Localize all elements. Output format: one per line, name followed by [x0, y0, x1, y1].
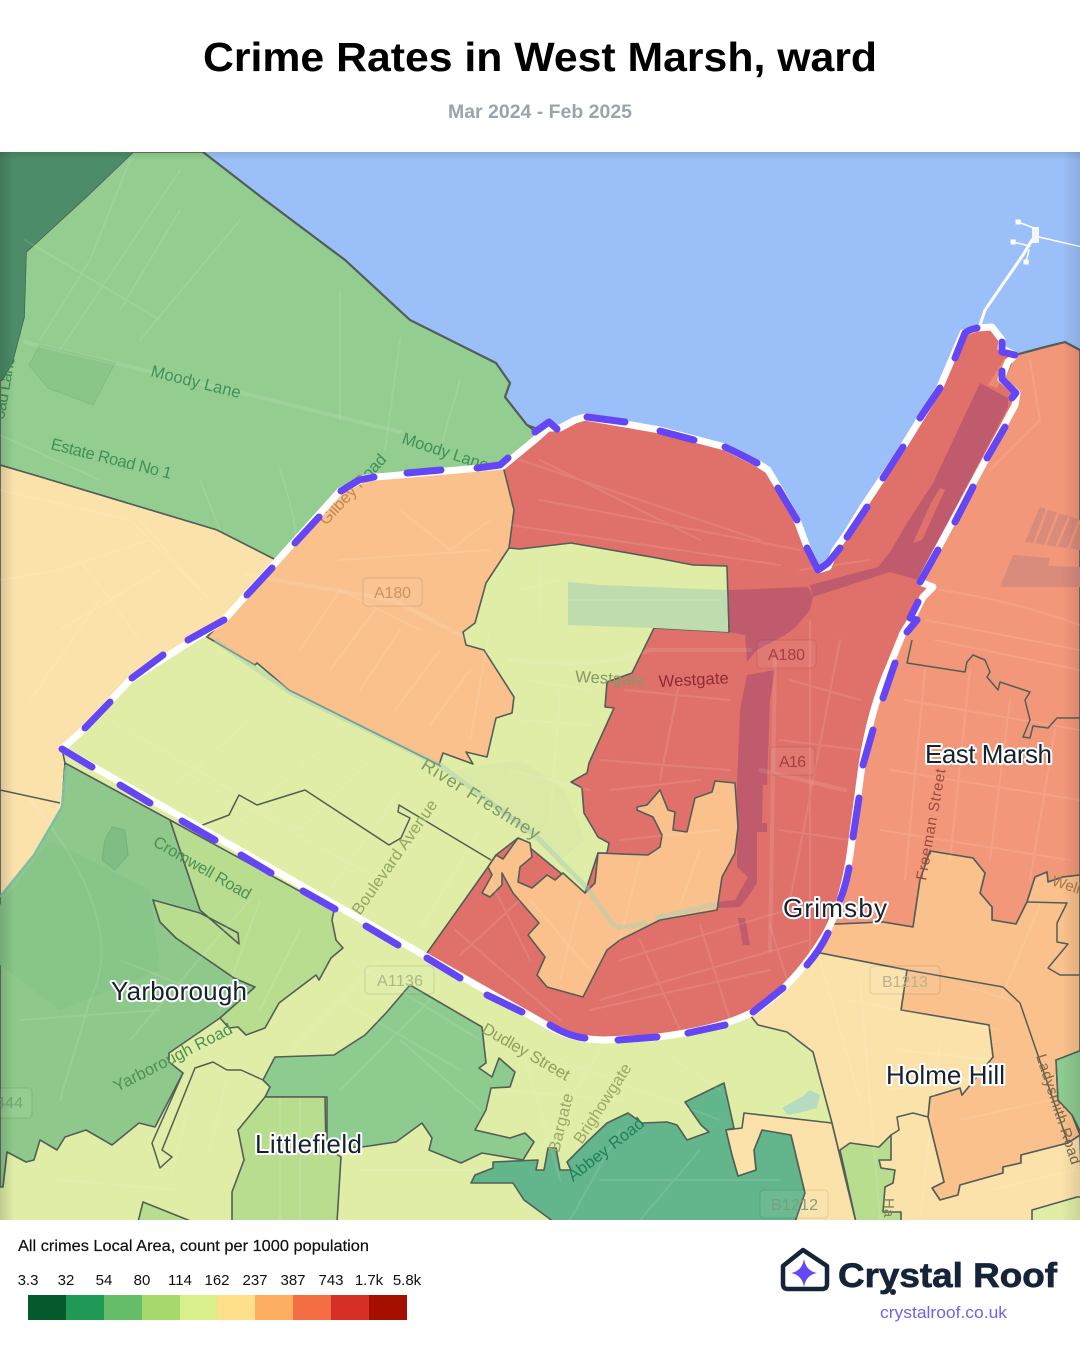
road shield: A1136: A1136	[377, 973, 423, 990]
ward: street network	[110, 460, 870, 1030]
ward boundary: West Marsh	[62, 327, 1017, 1040]
north quay strip	[988, 358, 1009, 388]
road shield: A16: A16	[779, 754, 806, 771]
road shield: B1212: B1212	[771, 1197, 818, 1214]
logo wordmark: Crystal Roof	[838, 1257, 1058, 1295]
ward: docks and water basins	[717, 383, 1008, 945]
road label: Dudley Street: Dudley Street	[479, 1020, 573, 1085]
river on western edge	[0, 765, 66, 897]
road label: Brighowgate: Brighowgate	[570, 1060, 635, 1147]
legend tick labels: 162	[204, 1272, 230, 1289]
legend colour scale	[28, 1295, 407, 1320]
ward: pale green residential west section	[62, 543, 729, 958]
road label: Yarborough Road: Yarborough Road	[111, 1020, 236, 1096]
legend	[18, 1238, 422, 1320]
pond	[782, 1090, 820, 1115]
title: Crime Rates in West Marsh, ward	[203, 34, 877, 80]
neighbourhood: East Marsh	[815, 342, 1080, 927]
jetty arms	[1013, 222, 1080, 262]
legend tick labels: 32	[58, 1272, 74, 1289]
West Marsh ward: red base	[62, 327, 1017, 1040]
road label: Westgate west: Westgate	[575, 668, 646, 690]
road shield: A16	[770, 747, 815, 775]
water: Humber estuary	[190, 152, 1080, 600]
legend tick labels: 237	[242, 1272, 268, 1289]
road shield: A1444	[0, 1088, 32, 1118]
road label: Moody Lane east: Moody Lane	[400, 430, 491, 475]
road label: Bargate: Bargate	[545, 1091, 577, 1154]
road label: Estate Road No 1: Estate Road No 1	[49, 435, 174, 483]
boundary white casing	[62, 327, 1017, 1040]
south-west street network	[20, 800, 780, 1220]
choropleth map	[0, 152, 1080, 1220]
road shield: A1136	[365, 966, 434, 994]
place: Holme Hill: Holme Hill	[886, 1060, 1005, 1090]
east and south-east street network	[820, 360, 1080, 1220]
legend tick labels: 114	[168, 1272, 192, 1289]
place: Yarborough: Yarborough	[111, 976, 247, 1006]
legend tick labels: 743	[318, 1272, 344, 1289]
place: Littlefield: Littlefield	[255, 1129, 362, 1159]
place labels	[111, 739, 1052, 1159]
neighbourhood: pale yellow west	[0, 465, 276, 897]
neighbourhood: dark green north-west corner	[0, 152, 133, 380]
LSOA outline: Well area	[1027, 902, 1080, 975]
road label: River Freshney: River Freshney	[418, 754, 544, 843]
subtitle: date range: Mar 2024 - Feb 2025	[448, 102, 632, 123]
small basin	[738, 918, 750, 945]
west basin	[728, 587, 813, 662]
pier line	[980, 240, 1032, 325]
road shield: B1213: B1213	[882, 974, 928, 991]
road label: Cromwell Road: Cromwell Road	[150, 833, 254, 903]
legend tick labels	[18, 1272, 422, 1289]
LSOA outline: Holme Hill	[891, 1113, 928, 1135]
LSOA outline: Boulevard Avenue	[200, 790, 491, 860]
green area patch near Moody Lane	[29, 345, 115, 405]
neighbourhood: orange south-east	[815, 851, 1080, 1200]
website: crystalroof.co.uk	[880, 1304, 1008, 1322]
small light green block south	[138, 1202, 193, 1222]
road shield: A180 west: A180	[374, 585, 411, 602]
road label: Abbey Road: Abbey Road	[564, 1114, 648, 1185]
coast outlines	[203, 152, 1080, 430]
fish dock	[1025, 507, 1080, 550]
legend tick labels: 54	[96, 1272, 112, 1289]
road label: Moody Lane: Moody Lane	[149, 362, 243, 402]
pier head	[1032, 227, 1039, 243]
LSOA outline: Yarborough Road	[152, 1062, 263, 1168]
Riverhead channel	[717, 670, 775, 908]
Alexandra dock	[810, 383, 1008, 597]
neighbourhood: bottom right pale block	[1032, 1197, 1080, 1222]
neighbourhood: Yarborough	[0, 763, 255, 1187]
road label: Ha: Ha	[880, 1198, 897, 1218]
dock basin	[1000, 555, 1080, 587]
east docks tint	[1000, 507, 1080, 587]
jetty ends	[1013, 222, 1026, 262]
road label: Freeman Street: Freeman Street	[913, 767, 950, 882]
neighbourhood: mid green south	[263, 985, 534, 1163]
road labels	[0, 355, 1080, 1218]
map edge vignette	[0, 152, 1080, 1220]
legend tick labels: 80	[134, 1272, 150, 1289]
base land area	[0, 152, 1080, 1220]
logo keyhole dot on the y	[890, 1289, 896, 1295]
ward: orange section central south	[482, 781, 738, 997]
neighbourhood: Holme Hill yellow	[750, 952, 1080, 1222]
River Freshney	[215, 640, 717, 927]
road shield: B1213	[870, 966, 940, 994]
road shield: B1212	[760, 1190, 828, 1218]
neighbourhood: north-west industrial area	[0, 152, 545, 570]
legend tick labels: 387	[280, 1272, 306, 1289]
neighbourhood: green block east of Holme Hill	[840, 1135, 901, 1222]
fish dock quays	[1034, 509, 1079, 550]
road label: Westgate east: Westgate	[658, 669, 729, 691]
Yarborough darker interior	[0, 840, 160, 1010]
quay strip	[913, 488, 945, 543]
neighbourhood outlines inside the pale area	[0, 640, 1080, 1168]
neighbourhood: Littlefield block	[232, 1097, 341, 1222]
grimsby dock pier	[980, 222, 1080, 325]
LSOA outline: East Marsh north	[907, 640, 1080, 738]
ward: dock quay strips	[913, 358, 1009, 543]
road shield: A180 west	[363, 578, 422, 606]
title and subtitle header	[203, 34, 877, 123]
ward: green tinted industrial block	[568, 582, 728, 632]
road label: Boulevard Avenue: Boulevard Avenue	[349, 797, 441, 918]
legend title: All crimes Local Area, count per 1000 population	[18, 1238, 369, 1255]
icon: house with star	[783, 1250, 827, 1289]
road shield: A180 east	[757, 640, 816, 668]
neighbourhood: pale yellow block south	[726, 1113, 856, 1222]
legend tick labels: 3.3	[18, 1272, 38, 1289]
ward: slightly darker park area	[455, 760, 585, 860]
place: Grimsby: Grimsby	[783, 893, 887, 923]
neighbourhood: Abbey Road dark green	[471, 1083, 805, 1222]
footer with legend and logo	[18, 1238, 1058, 1322]
road shield: A180 east: A180	[768, 647, 805, 664]
legend tick labels: 1.7k	[355, 1272, 384, 1289]
LSOA outline: west	[0, 790, 60, 803]
LSOA outline: Ladysmith	[907, 970, 1068, 1143]
neighbourhood: light green south of boundary	[153, 820, 343, 1035]
legend tick labels: 5.8k	[393, 1272, 422, 1289]
place: East Marsh: East Marsh	[925, 739, 1052, 769]
ward: orange section north-west	[207, 466, 514, 765]
road label: Gilbey Road: Gilbey Road	[316, 451, 390, 529]
tree area	[102, 827, 128, 870]
Crystal Roof logo	[783, 1250, 1058, 1322]
boundary purple dashes	[62, 328, 1016, 1040]
west and north-west street network	[0, 160, 460, 700]
neighbourhood: green edge at right	[1056, 1050, 1080, 1135]
